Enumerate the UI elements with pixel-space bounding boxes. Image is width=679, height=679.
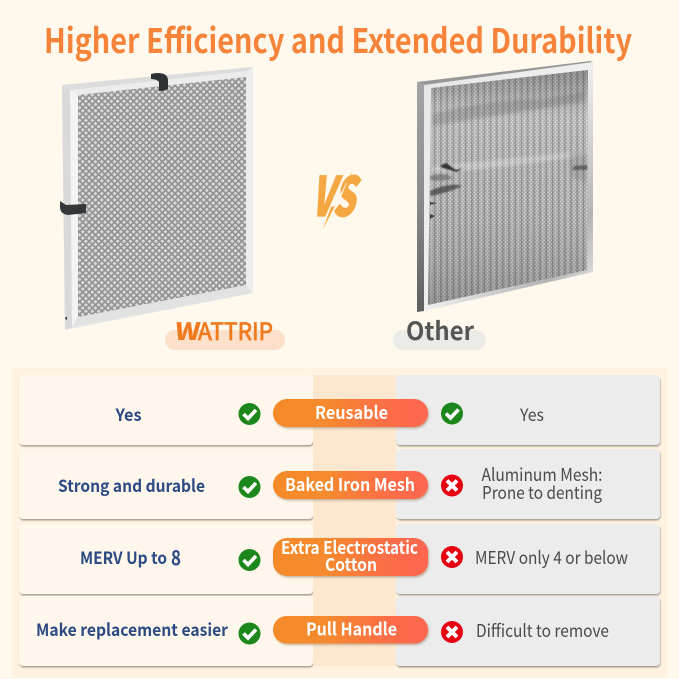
pill: Extra Electrostatic Cotton: Cotton: [325, 552, 377, 577]
WATTRIP brand label: W: [174, 312, 203, 347]
Other brand label: Other: [406, 312, 474, 348]
pill: Extra Electrostatic Cotton: Extra Electrostatic: [281, 535, 418, 560]
right text: Aluminum Mesh: Prone to denting: [482, 480, 602, 505]
icon: check row 2 left: [238, 476, 260, 498]
left text: Strong and durable: Strong and durable: [58, 472, 205, 497]
VS badge: VS: [306, 153, 370, 232]
center highlight column: [313, 375, 396, 666]
Other filter product image: [417, 61, 593, 312]
row 3 left cell: [19, 524, 313, 594]
left text: Yes: Yes: [115, 401, 142, 426]
pull handle side: [60, 201, 86, 215]
right text: Difficult to remove: Difficult to remove: [476, 618, 609, 643]
row 4 right cell: [396, 596, 660, 666]
WATTRIP filter product image: [60, 67, 253, 330]
pill: Reusable: [273, 399, 428, 427]
pill: Extra Electrostatic Cotton: [273, 535, 428, 577]
row 1 left cell: [19, 375, 313, 445]
pill: Pull Handle: [273, 616, 428, 644]
right text: MERV only 4 or below: MERV only 4 or below: [475, 545, 628, 570]
pill: Baked Iron Mesh: Baked Iron Mesh: [285, 472, 415, 497]
pull handle top: [151, 73, 168, 91]
right text: Aluminum Mesh: [482, 462, 602, 505]
row 2 left cell: [19, 449, 313, 519]
comparison panel: [12, 368, 667, 677]
left text: MERV Up to 8: 8: [171, 542, 181, 571]
icon: cross row 2 right: [441, 474, 463, 496]
icon: check row 1 left: [238, 403, 260, 425]
right text: Yes: Yes: [519, 401, 544, 426]
row 4 left cell: [19, 596, 313, 666]
row 2 right cell: [396, 449, 660, 519]
icon: check row 1 right: [441, 402, 463, 424]
icon: cross row 4 right: [441, 621, 463, 643]
left text: Make replacement easier: Make replacement easier: [36, 616, 229, 641]
pill: Reusable: Reusable: [315, 400, 388, 425]
row 1 right cell: [396, 375, 660, 445]
icon: check row 3 left: [238, 549, 260, 571]
pill: Pull Handle: Pull Handle: [306, 616, 397, 642]
left text: MERV Up to 8: MERV Up to: [80, 544, 167, 569]
icon: cross row 3 right: [441, 546, 463, 568]
WATTRIP brand label: ATTRIP: [198, 312, 273, 347]
row 3 right cell: [396, 524, 660, 594]
icon: check row 4 left: [238, 622, 260, 644]
right text: Aluminum Mesh: Aluminum Mesh:: [482, 462, 602, 487]
WATTRIP brand label: [165, 312, 285, 350]
